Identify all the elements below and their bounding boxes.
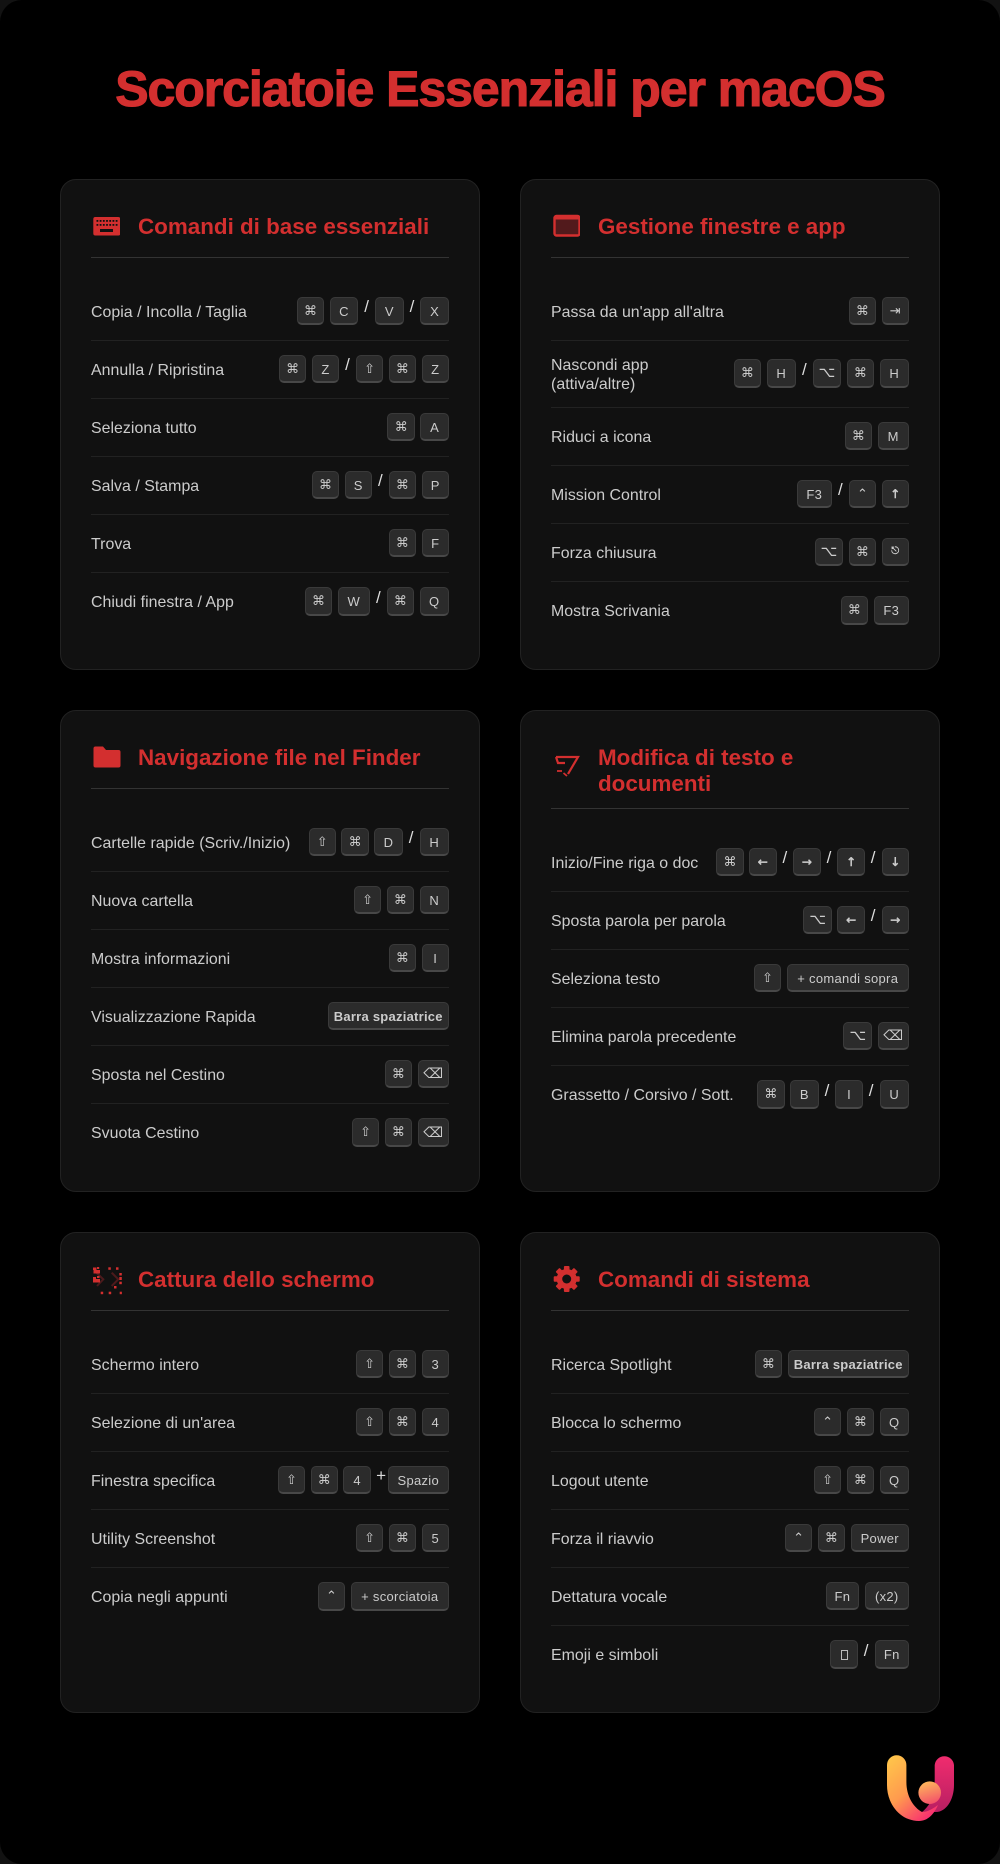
row: selezione area: ⌘: [396, 1414, 409, 1430]
row: sposta nel cestino: ⌫: [423, 1066, 443, 1082]
row: annulla: [91, 341, 449, 399]
row: forza chiusura: ⌥: [821, 544, 837, 560]
heading: Gestione finestre e app: [598, 214, 846, 239]
row: logout: ⌘: [854, 1472, 867, 1488]
shortcut list: [551, 1350, 909, 1669]
row: blocca schermo: Blocca lo schermo: [551, 1414, 681, 1432]
row: riduci: M: [888, 428, 899, 444]
row: seleziona testo: + comandi sopra: [797, 970, 898, 986]
row: cartelle rapide: H: [429, 834, 439, 850]
row: visualizzazione rapida: Visualizzazione Rapida: [91, 1008, 256, 1026]
row: copia: X: [430, 304, 439, 318]
row: scrivania: ⌘: [848, 603, 861, 618]
row: seleziona testo: [551, 950, 909, 1008]
row: finestra specifica: ⇧: [286, 1472, 297, 1488]
shortcut list: [91, 297, 449, 616]
heading: [598, 745, 793, 796]
row: grassetto: /: [869, 1080, 874, 1100]
row: riavvio: Forza il riavvio: [551, 1530, 654, 1548]
icon: folder: [94, 746, 120, 768]
row: sposta nel cestino: Sposta nel Cestino: [91, 1066, 225, 1084]
row: emoji: Emoji e simboli: [551, 1647, 658, 1664]
row: grassetto: ⌘: [764, 1087, 777, 1102]
row: copia: ⌘: [304, 304, 317, 318]
row: grassetto: B: [800, 1087, 809, 1102]
row: salva: P: [431, 478, 440, 492]
row: nascondi: ⌘: [854, 366, 867, 381]
row: forza chiusura: ⎋: [891, 546, 899, 557]
row: seleziona testo: ⇧: [762, 970, 773, 986]
row: schermo intero: Schermo intero: [91, 1356, 199, 1374]
shortcut list: [91, 1350, 449, 1611]
row: selezione area: [91, 1394, 449, 1452]
shortcut list: [551, 297, 909, 625]
row: riduci: [551, 408, 909, 466]
row: nascondi: Nascondi app: [551, 356, 649, 374]
row: sposta parola: →: [890, 913, 900, 927]
row: grassetto: Grassetto / Corsivo / Sott.: [551, 1087, 734, 1104]
row: copia negli appunti: ⌃: [326, 1589, 337, 1604]
row: nuova cartella: N: [429, 892, 439, 908]
row: spotlight: Barra spaziatrice: [794, 1356, 903, 1372]
row: utility screenshot: Utility Screenshot: [91, 1530, 215, 1548]
panel: navigazione file nel finder: [60, 710, 480, 1192]
row: selezione area: 4: [431, 1414, 439, 1430]
row: passa: Passa da un'app all'altra: [551, 304, 724, 320]
logo: [887, 1755, 954, 1821]
heading: documenti: [598, 771, 711, 796]
row: seleziona: ⌘: [395, 420, 408, 434]
row: logout: ⇧: [822, 1472, 833, 1488]
row: trova: F: [431, 536, 439, 550]
row: riduci: Riduci a icona: [551, 428, 651, 446]
row: inizio fine: /: [782, 848, 787, 867]
row: cartelle rapide: /: [409, 828, 414, 847]
row: nascondi: H: [889, 366, 899, 381]
row: sposta parola: [551, 892, 909, 950]
row: schermo intero: 3: [431, 1356, 439, 1372]
row: visualizzazione rapida: [91, 988, 449, 1046]
row: svuota cestino: ⌫: [423, 1124, 443, 1140]
row: inizio fine: ←: [758, 855, 768, 869]
row: nascondi: [551, 341, 909, 408]
row: grassetto: [551, 1080, 909, 1109]
row: inizio fine: ↓: [890, 855, 900, 869]
row: dettatura: Fn: [835, 1588, 850, 1604]
row: sposta parola: /: [871, 906, 876, 925]
row: forza chiusura: Forza chiusura: [551, 544, 657, 562]
row: nuova cartella: Nuova cartella: [91, 892, 193, 910]
icon: gear: [554, 1266, 580, 1292]
row: spotlight: [551, 1336, 909, 1394]
shortcut list: [91, 828, 449, 1147]
row: elimina parola: [551, 1008, 909, 1066]
row: copia: V: [385, 304, 394, 318]
row: finestra specifica: ⌘: [318, 1472, 331, 1488]
panel: cattura dello schermo: [60, 1232, 480, 1713]
row: svuota cestino: [91, 1118, 449, 1147]
row: blocca schermo: ⌘: [854, 1414, 867, 1430]
row: nuova cartella: ⇧: [362, 892, 373, 908]
row: sposta parola: ⌥: [809, 912, 826, 928]
row: nascondi: /: [802, 360, 807, 378]
row: copia: Copia / Incolla / Taglia: [91, 304, 247, 320]
row: logout: [551, 1452, 909, 1510]
row: annulla: Z: [431, 362, 439, 376]
row: emoji: [551, 1640, 909, 1669]
row: informazioni: ⌘: [396, 950, 409, 966]
row: finestra specifica: +: [376, 1466, 386, 1485]
row: scrivania: F3: [883, 603, 899, 618]
panel: comandi di base essenziali: [60, 179, 480, 670]
row: emoji: Fn: [884, 1647, 900, 1662]
row: informazioni: [91, 930, 449, 988]
row: cartelle rapide: Cartelle rapide (Scriv./Inizio): [91, 834, 290, 852]
row: sposta nel cestino: [91, 1046, 449, 1104]
row: svuota cestino: ⇧: [360, 1125, 371, 1140]
row: nascondi: (attiva/altre): [551, 376, 635, 392]
row: inizio fine: /: [871, 848, 876, 867]
row: grassetto: I: [847, 1087, 851, 1102]
row: svuota cestino: Svuota Cestino: [91, 1125, 199, 1142]
row: sposta parola: Sposta parola per parola: [551, 912, 726, 930]
row: trova: [91, 515, 449, 573]
row: annulla: ⌘: [396, 362, 409, 376]
heading: Navigazione file nel Finder: [138, 745, 420, 770]
row: logout: Q: [889, 1472, 899, 1488]
row: annulla: /: [345, 355, 350, 374]
row: copia negli appunti: + scorciatoia: [361, 1589, 438, 1604]
row: informazioni: I: [433, 950, 437, 966]
row: trova: ⌘: [396, 536, 409, 550]
row: riavvio: [551, 1510, 909, 1568]
row: annulla: ⌘: [286, 362, 299, 376]
row: emoji: /: [864, 1640, 869, 1660]
row: forza chiusura: [551, 524, 909, 582]
row: elimina parola: Elimina parola precedente: [551, 1028, 736, 1046]
row: finestra specifica: 4: [353, 1472, 361, 1488]
row: riduci: ⌘: [852, 428, 865, 444]
row: schermo intero: [91, 1336, 449, 1394]
row: utility screenshot: ⇧: [364, 1530, 375, 1546]
row: utility screenshot: 5: [431, 1530, 439, 1546]
row: seleziona: Seleziona tutto: [91, 420, 197, 436]
row: seleziona: A: [430, 420, 439, 434]
row: blocca schermo: ⌃: [822, 1414, 833, 1430]
row: blocca schermo: [551, 1394, 909, 1452]
row: elimina parola: ⌥: [849, 1028, 866, 1044]
row: mission control: Mission Control: [551, 486, 661, 504]
row: chiudi: ⌘: [312, 594, 325, 609]
panel: modifica di testo e documenti: [520, 710, 940, 1192]
row: inizio fine: /: [827, 848, 831, 867]
row: inizio fine: Inizio/Fine riga o doc: [551, 854, 698, 872]
row: grassetto: U: [889, 1087, 899, 1102]
row: annulla: Z: [321, 362, 330, 376]
row: sposta parola: ←: [846, 913, 856, 927]
row: passa: ⌘: [856, 304, 869, 318]
row: copia: /: [364, 297, 369, 316]
row: scrivania: [551, 596, 909, 625]
row: copia negli appunti: Copia negli appunti: [91, 1589, 228, 1606]
row: sposta nel cestino: ⌘: [392, 1066, 405, 1082]
row: annulla: ⇧: [364, 362, 375, 376]
row: mission control: F3: [806, 486, 822, 502]
row: inizio fine: ↑: [846, 855, 856, 869]
row: salva: S: [354, 478, 363, 492]
row: finestra specifica: Spazio: [397, 1472, 439, 1488]
icon: window: [553, 214, 580, 237]
heading: Modifica di testo e: [598, 745, 793, 770]
heading: Comandi di base essenziali: [138, 214, 429, 239]
row: nascondi: ⌘: [741, 366, 754, 381]
row: nascondi: ⌥: [819, 365, 835, 381]
row: passa: ⇥: [890, 304, 901, 318]
row: informazioni: Mostra informazioni: [91, 950, 230, 968]
row: nascondi: H: [776, 366, 786, 381]
row: copia negli appunti: [91, 1582, 449, 1611]
row: finestra specifica: [91, 1452, 449, 1510]
row: nuova cartella: [91, 872, 449, 930]
row: elimina parola: ⌫: [883, 1028, 903, 1044]
row: schermo intero: ⌘: [396, 1356, 409, 1372]
row: salva: [91, 457, 449, 515]
row: trova: Trova: [91, 536, 131, 552]
row: svuota cestino: ⌘: [392, 1125, 405, 1140]
panel: comandi di sistema: [520, 1232, 940, 1713]
row: mission control: ↑: [890, 487, 900, 501]
row: finestra specifica: Finestra specifica: [91, 1472, 215, 1490]
row: riavvio: ⌃: [793, 1530, 804, 1546]
row: chiudi: Chiudi finestra / App: [91, 594, 234, 611]
row: cartelle rapide: ⇧: [317, 834, 328, 850]
row: dettatura: (x2): [875, 1588, 899, 1604]
row: cartelle rapide: D: [384, 834, 393, 850]
row: utility screenshot: ⌘: [396, 1530, 409, 1546]
row: chiudi: W: [347, 594, 360, 609]
row: salva: Salva / Stampa: [91, 478, 199, 494]
row: salva: ⌘: [396, 478, 409, 492]
row: blocca schermo: Q: [889, 1414, 899, 1430]
row: mission control: /: [838, 480, 843, 499]
row: forza chiusura: ⌘: [856, 544, 869, 560]
row: utility screenshot: [91, 1510, 449, 1568]
row: scrivania: Mostra Scrivania: [551, 603, 670, 620]
heading: Cattura dello schermo: [138, 1267, 374, 1292]
row: mission control: ⌃: [857, 486, 868, 502]
row: copia: C: [339, 304, 349, 318]
row: riavvio: ⌘: [825, 1530, 838, 1546]
row: copia: /: [410, 297, 414, 316]
icon: pen triangle: [555, 756, 580, 777]
row: inizio fine: →: [802, 855, 812, 869]
row: chiudi: ⌘: [394, 594, 407, 609]
row: spotlight: Ricerca Spotlight: [551, 1356, 672, 1374]
row: selezione area: Selezione di un'area: [91, 1414, 235, 1432]
row: salva: /: [378, 471, 383, 490]
row: cartelle rapide: [91, 814, 449, 872]
row: dettatura: Dettatura vocale: [551, 1588, 667, 1606]
row: nuova cartella: ⌘: [394, 892, 407, 908]
icon: keyboard: [93, 217, 120, 236]
row: mission control: [551, 466, 909, 524]
row: chiudi: [91, 587, 449, 616]
title: Scorciatoie Essenziali per macOS: [115, 61, 885, 117]
row: logout: Logout utente: [551, 1472, 649, 1490]
row: schermo intero: ⇧: [364, 1356, 375, 1372]
row: inizio fine: [551, 834, 909, 892]
row: cartelle rapide: ⌘: [349, 834, 362, 850]
row: dettatura: [551, 1568, 909, 1626]
row: passa: [551, 283, 909, 341]
row: seleziona testo: Seleziona testo: [551, 970, 660, 988]
row: chiudi: Q: [429, 594, 439, 609]
row: selezione area: ⇧: [364, 1414, 375, 1430]
row: inizio fine: ⌘: [723, 854, 736, 870]
row: riavvio: Power: [861, 1530, 899, 1546]
row: grassetto: /: [825, 1080, 829, 1100]
panel: gestione finestre e app: [520, 179, 940, 670]
row: salva: ⌘: [319, 478, 332, 492]
icon: dashed selection: [93, 1267, 122, 1294]
shortcut list: [551, 848, 909, 1109]
row: annulla: Annulla / Ripristina: [91, 362, 224, 378]
row: chiudi: /: [376, 588, 381, 606]
row: visualizzazione rapida: Barra spaziatrice: [334, 1008, 443, 1024]
heading: Comandi di sistema: [598, 1267, 810, 1292]
row: seleziona: [91, 399, 449, 457]
row: copia: [91, 283, 449, 341]
row: spotlight: ⌘: [762, 1356, 775, 1372]
